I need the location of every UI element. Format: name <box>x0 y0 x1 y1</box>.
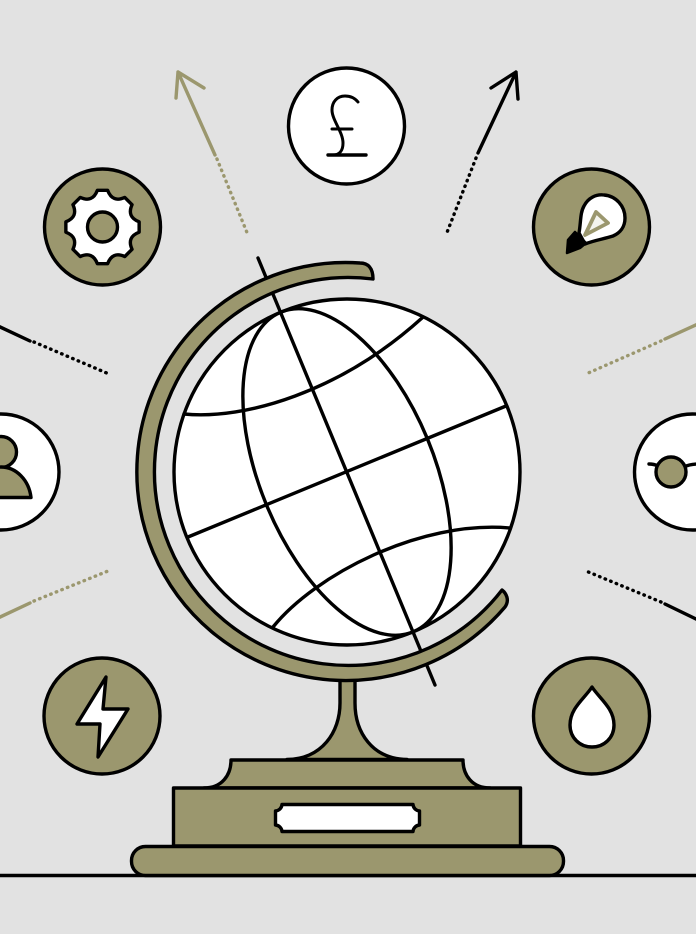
ray: right lower black <box>586 571 696 620</box>
icon: lightning bolt <box>44 658 160 774</box>
meridian arc stand <box>137 263 507 681</box>
arrow: top left olive <box>176 72 248 235</box>
globe stand stem <box>287 678 407 760</box>
icon: person <box>0 414 59 530</box>
icon: glasses <box>634 414 696 530</box>
icon: water drop <box>534 658 650 774</box>
arrow: top right black <box>446 72 518 235</box>
icon: pound sign <box>288 68 404 184</box>
trophy middle tier <box>174 788 520 846</box>
trophy upper tier <box>204 760 490 788</box>
ray: left lower olive <box>0 571 108 618</box>
name plate <box>276 804 420 832</box>
globe <box>174 279 520 665</box>
ray: right upper olive <box>586 324 696 374</box>
trophy base <box>132 846 564 876</box>
globe axis <box>258 258 435 685</box>
ray: left upper black <box>0 326 109 374</box>
icon: gear <box>44 169 160 285</box>
icon: light bulb <box>534 169 650 285</box>
